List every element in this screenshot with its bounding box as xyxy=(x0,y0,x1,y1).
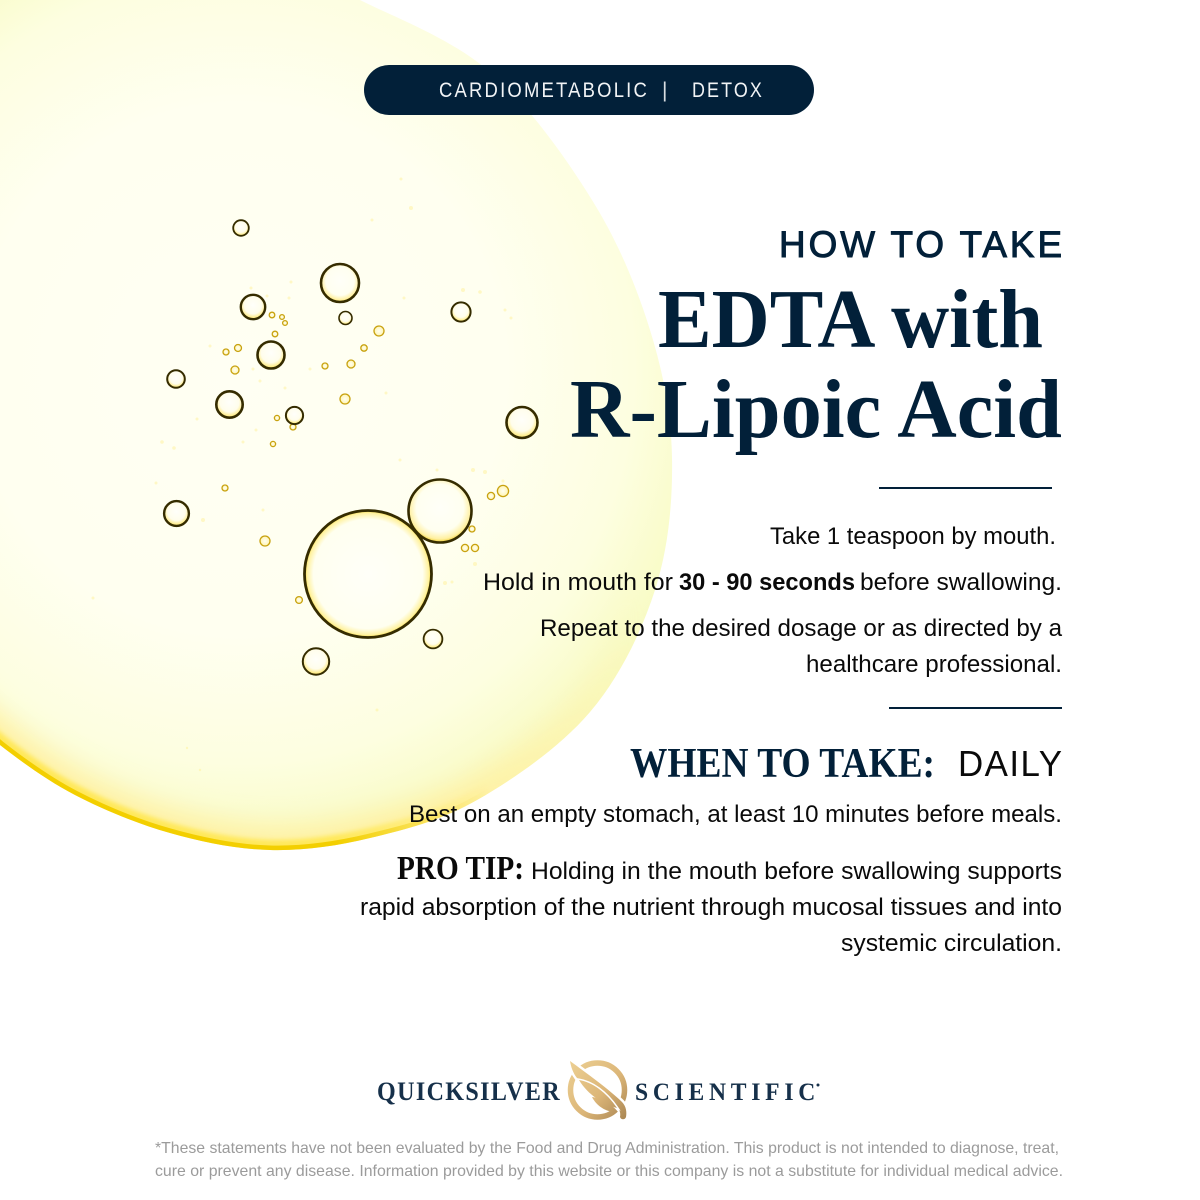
timing text: Best on an empty stomach, at least 10 minutes before meals. xyxy=(409,801,1062,828)
title: EDTA with xyxy=(658,273,1043,366)
dosage instructions: 30 - 90 seconds xyxy=(679,569,855,596)
when to take heading: WHEN TO TAKE: xyxy=(630,741,935,787)
category pill: DETOX xyxy=(692,79,764,102)
logo: QUICKSILVER xyxy=(377,1077,561,1106)
logo: SCIENTIFIC xyxy=(635,1079,820,1106)
title: R-Lipoic Acid xyxy=(570,363,1062,456)
category pill xyxy=(364,65,814,115)
dosage instructions: healthcare professional. xyxy=(806,651,1062,678)
title xyxy=(570,224,1065,456)
oil droplet background xyxy=(0,0,700,880)
dosage instructions: Hold in mouth for xyxy=(483,569,673,596)
dosage instructions: before swallowing. xyxy=(860,569,1062,596)
large bubbles xyxy=(164,220,538,675)
when to take heading: DAILY xyxy=(958,743,1064,784)
logo xyxy=(377,1061,820,1119)
dosage instructions xyxy=(483,523,1063,678)
pro tip: rapid absorption of the nutrient through mucosal tissues and into xyxy=(360,894,1062,921)
pro tip: PRO TIP: xyxy=(397,850,524,887)
category pill: CARDIOMETABOLIC xyxy=(439,79,649,102)
small bubbles xyxy=(222,312,509,603)
disclaimer: cure or prevent any disease. Information provided by this website or this company is not a substitute for individual medical advice. xyxy=(155,1163,1063,1180)
title: HOW TO TAKE xyxy=(779,224,1065,265)
pro tip xyxy=(360,850,1062,957)
pro tip: Holding in the mouth before swallowing supports xyxy=(531,858,1062,885)
disclaimer: *These statements have not been evaluated by the Food and Drug Administration. This product is not intended to diagnose, treat, xyxy=(155,1140,1059,1157)
disclaimer xyxy=(155,1140,1063,1180)
icon: gold feather ring xyxy=(570,1061,626,1119)
faint tiny bubbles xyxy=(92,178,512,771)
dosage instructions: Repeat to the desired dosage or as directed by a xyxy=(540,615,1063,642)
pro tip: systemic circulation. xyxy=(841,930,1062,957)
dosage instructions: Take 1 teaspoon by mouth. xyxy=(770,523,1056,550)
category pill: | xyxy=(662,79,667,102)
